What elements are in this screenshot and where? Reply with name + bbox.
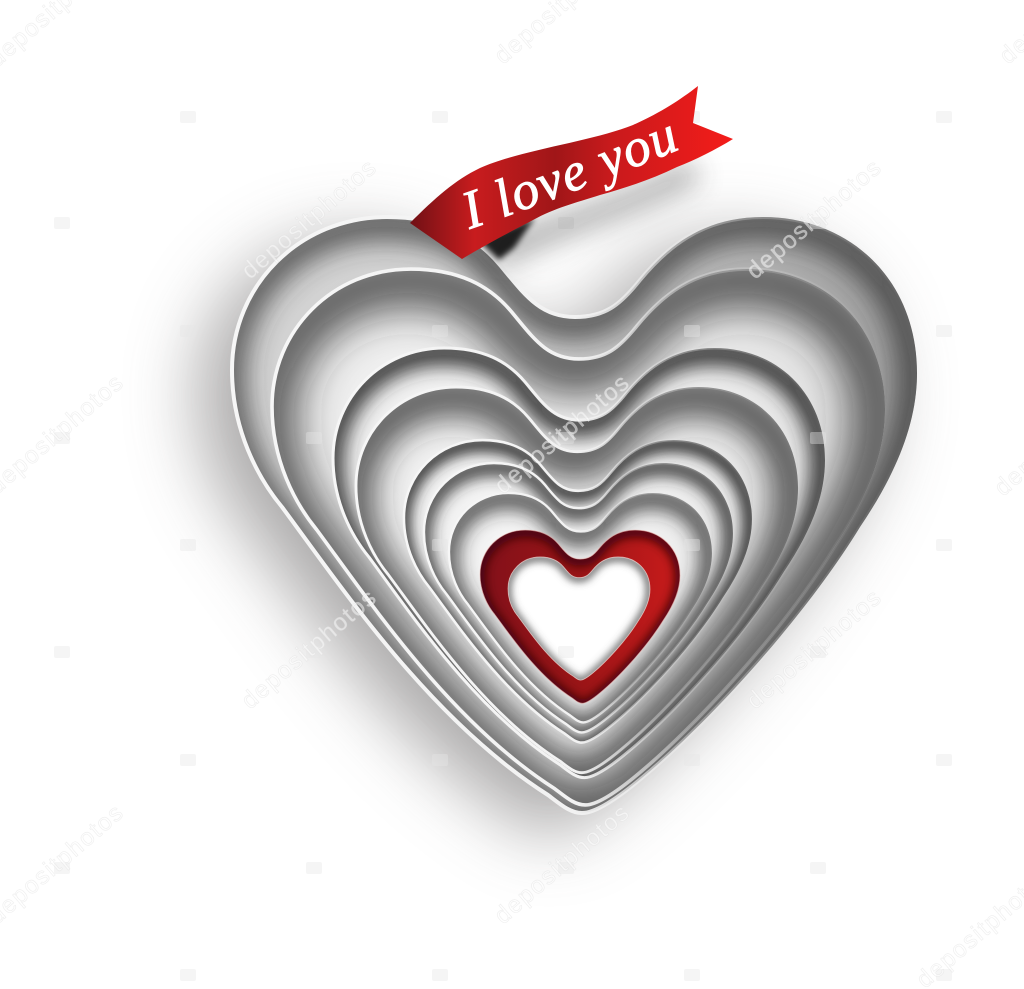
watermark: depositphotos text: depositphotos — [741, 155, 886, 285]
watermark: depositphotos text: depositphotos — [489, 800, 634, 930]
ribbon text: I love you — [463, 126, 679, 230]
watermark: depositphotos text: depositphotos — [489, 370, 634, 500]
layer 5 — [402, 438, 752, 744]
layer 2 — [270, 267, 885, 807]
layer 3 — [332, 346, 825, 780]
heart drop shadow — [198, 239, 883, 835]
paper cut heart — [230, 216, 917, 815]
ribbon banner — [410, 86, 733, 259]
layer 7 — [448, 492, 712, 724]
watermark: camera icons — [54, 111, 952, 981]
watermark: depositphotos text: depositphotos — [236, 155, 381, 285]
watermark: depositphotos text: depositphotos — [236, 585, 381, 715]
white heart centre — [508, 556, 650, 680]
layer 1: outer ring — [230, 216, 917, 815]
ribbon shadow — [478, 160, 700, 265]
layer 6 — [423, 462, 733, 734]
red heart ring — [480, 530, 680, 704]
layer 4 — [354, 386, 798, 774]
watermark: depositphotos text: depositphotos — [741, 585, 886, 715]
